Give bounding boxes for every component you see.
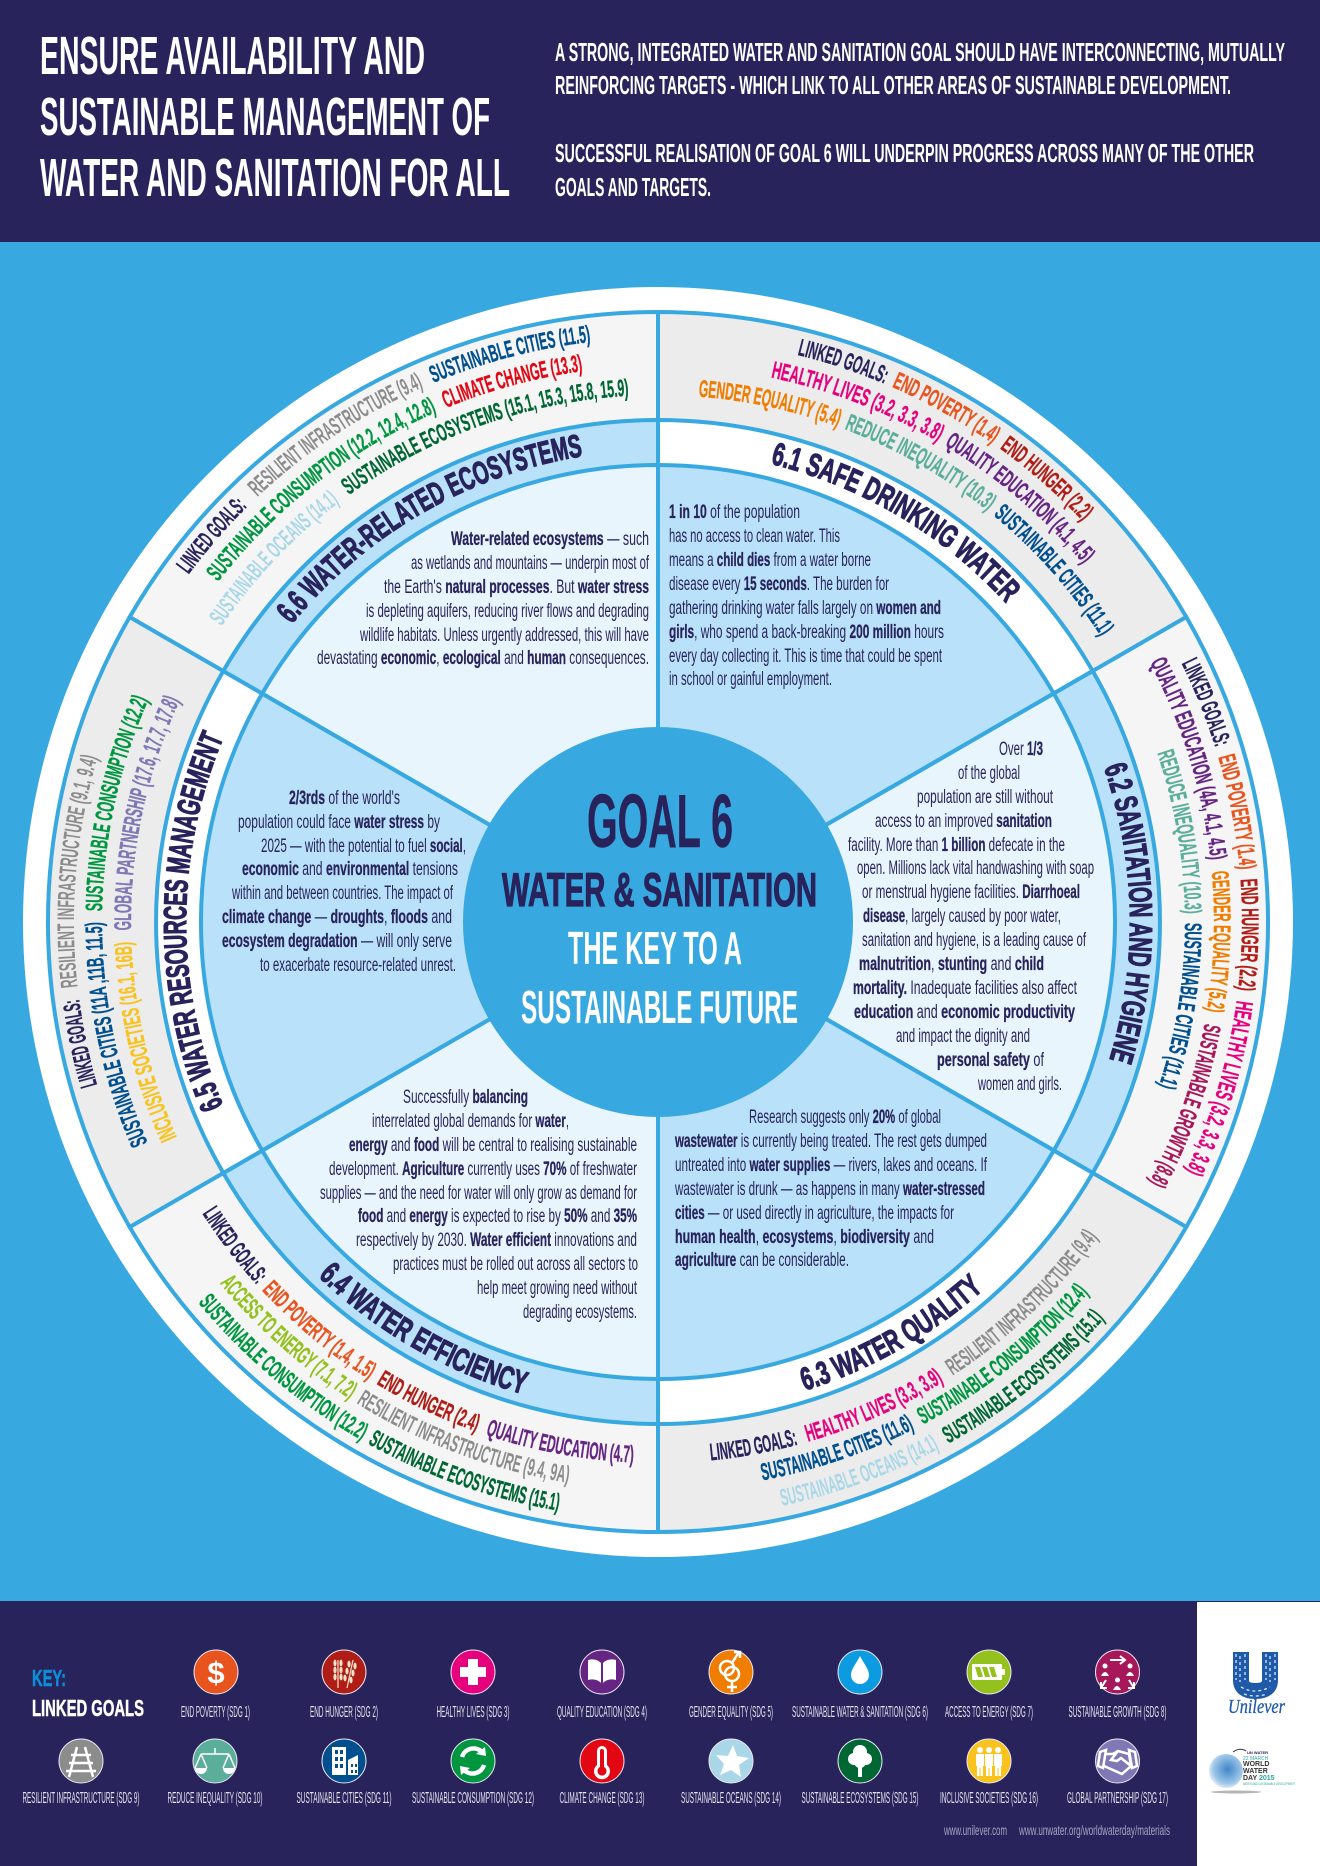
icon: end hunger	[310, 1650, 378, 1721]
panel: 6.4 water efficiency	[127, 1021, 656, 1534]
text: GLOBAL PARTNERSHIP (SDG 17)	[1067, 1790, 1168, 1807]
body text 6.2: disease, largely caused by poor water,	[863, 906, 1061, 927]
body text 6.2: Over 1/3	[999, 739, 1043, 760]
body text 6.5: population could face water stress by	[238, 812, 440, 833]
body text 6.5	[222, 788, 466, 976]
body text 6.2: sanitation and hygiene, is a leading cause of	[862, 930, 1086, 951]
body text 6.4: help meet growing need without	[477, 1278, 637, 1299]
title: WATER AND SANITATION FOR ALL	[40, 148, 510, 208]
body text 6.2: and impact the dignity and	[896, 1026, 1030, 1047]
linked goals 6.4: LINKED GOALS:	[202, 1205, 266, 1284]
body text 6.5: to exacerbate resource-related unrest.	[260, 955, 456, 976]
icon: sustainable cities	[296, 1739, 392, 1807]
linked goals 6.2: LINKED GOALS:	[1182, 656, 1230, 747]
icon: sustainable water and sanitation	[792, 1650, 928, 1721]
icon: sustainable growth	[1068, 1650, 1166, 1721]
body text 6.6: wildlife habitats. Unless urgently addressed, this will have	[359, 625, 649, 646]
icon: world water day logo	[1209, 1749, 1296, 1794]
centre circle	[463, 727, 853, 1117]
body text 6.5: climate change — droughts, floods and	[222, 907, 452, 928]
website links: www.unwater.org/worldwaterday/materials	[1018, 1822, 1170, 1838]
text: END HUNGER (SDG 2)	[310, 1704, 378, 1721]
icon: gender equality	[689, 1650, 773, 1721]
heading 6.3: 6.3 WATER QUALITY	[800, 1272, 980, 1390]
linked goals 6.5: SUSTAINABLE CONSUMPTION (12.2)	[81, 691, 154, 912]
linked goals 6.6: SUSTAINABLE CITIES (11.5)	[425, 299, 598, 409]
linked goals 6.3: SUSTAINABLE CITIES (11.6)	[760, 1414, 915, 1480]
text: GENDER EQUALITY (SDG 5)	[689, 1704, 773, 1721]
icon: access to energy	[945, 1650, 1033, 1721]
body text 6.4: interrelated global demands for water,	[372, 1111, 569, 1132]
linked goals 6.3: RESILIENT INFRASTRUCTURE (9.4)	[944, 1228, 1100, 1376]
linked goals 6.1: END POVERTY (1.4)	[892, 372, 1001, 446]
body text 6.2: women and girls.	[977, 1074, 1062, 1095]
body text 6.3: untreated into water supplies — rivers, lakes and oceans. If	[675, 1155, 987, 1176]
linked goals 6.3: HEALTHY LIVES (3.3, 3.9)	[804, 1368, 944, 1442]
icon: unilever logo	[1228, 1652, 1285, 1718]
linked goals 6.3: SUSTAINABLE CONSUMPTION (12.4)	[916, 1282, 1091, 1424]
body text 6.4: energy and food will be central to realising sustainable	[349, 1135, 637, 1156]
icon: world water day logo: UN WATER	[1247, 1750, 1268, 1755]
icon: sustainable ecosystems	[802, 1739, 918, 1807]
panel: 6.5 water resources management	[46, 614, 490, 1230]
body text 6.2: education and economic productivity	[854, 1002, 1075, 1023]
linked goals 6.4: RESILIENT INFRASTRUCTURE (9.4, 9A)	[356, 1390, 570, 1488]
body text 6.6: devastating economic, ecological and human consequences.	[317, 648, 649, 669]
body text 6.5: 2/3rds of the world's	[289, 788, 400, 809]
heading 6.5: 6.5 WATER RESOURCES MANAGEMENT	[163, 728, 222, 1112]
key to a sustainable future: SUSTAINABLE FUTURE	[521, 981, 798, 1033]
water and sanitation heading: WATER & SANITATION	[502, 863, 817, 916]
linked goals 6.4: SUSTAINABLE CONSUMPTION (12.2)	[200, 1294, 368, 1444]
header band	[0, 0, 1320, 242]
text: CLIMATE CHANGE (SDG 13)	[560, 1790, 644, 1807]
linked goals 6.2: END POVERTY (1.4)	[1218, 753, 1257, 869]
text: SUSTAINABLE CONSUMPTION (SDG 12)	[412, 1790, 534, 1807]
icon: world water day logo: WATER	[1243, 1768, 1268, 1775]
body text 6.2: facility. More than 1 billion defecate in the	[848, 835, 1065, 856]
body text 6.4: supplies — and the need for water will only grow as demand for	[320, 1183, 637, 1204]
key to a sustainable future	[521, 922, 798, 1033]
icon: quality education	[557, 1650, 647, 1721]
icon: world water day logo: DAY 2015	[1243, 1775, 1275, 1782]
body text 6.2: of the global	[958, 763, 1020, 784]
linked goals 6.3: SUSTAINABLE OCEANS (14.1)	[780, 1434, 940, 1506]
linked goals 6.2: QUALITY EDUCATION (4A, 4.1, 4.5)	[1148, 657, 1228, 860]
body text 6.1: means a child dies from a water borne	[669, 550, 871, 571]
linked goals 6.1	[699, 338, 1114, 638]
linked goals 6.1: GENDER EQUALITY (5.4)	[699, 380, 842, 431]
icon: sustainable consumption	[412, 1739, 534, 1807]
body text 6.3: cities — or used directly in agriculture, the impacts for	[675, 1203, 954, 1224]
body text 6.6: Water-related ecosystems — such	[451, 529, 649, 550]
body text 6.3: Research suggests only 20% of global	[749, 1107, 941, 1128]
linked goals 6.6: CLIMATE CHANGE (13.3)	[438, 333, 590, 430]
linked goals 6.5: INCLUSIVE SOCIETIES (16.1, 16B)	[74, 932, 217, 1146]
heading 6.6: 6.6 WATER-RELATED ECOSYSTEMS	[269, 347, 599, 703]
icon: resilient infrastructure	[22, 1739, 140, 1807]
body text 6.5: within and between countries. The impact of	[231, 883, 453, 904]
text: HEALTHY LIVES (SDG 3)	[436, 1704, 510, 1721]
body text 6.1: gathering drinking water falls largely on women and	[669, 598, 941, 619]
linked goals 6.2	[1146, 656, 1259, 1188]
key heading	[32, 1665, 144, 1721]
text: SUSTAINABLE ECOSYSTEMS (SDG 15)	[802, 1790, 918, 1807]
title	[40, 26, 510, 208]
text: END POVERTY (SDG 1)	[181, 1704, 250, 1721]
body text 6.6: the Earth's natural processes. But water stress	[384, 577, 649, 598]
icon: end poverty: $	[207, 1655, 225, 1690]
blue background	[0, 242, 1320, 1601]
body text 6.6	[317, 529, 649, 669]
text: SUSTAINABLE CITIES (SDG 11)	[296, 1790, 392, 1807]
goal 6 heading: GOAL 6	[587, 779, 733, 863]
body text 6.3: wastewater is currently being treated. The rest gets dumped	[674, 1131, 987, 1152]
body text 6.4	[320, 1087, 638, 1323]
linked goals 6.5: LINKED GOALS:	[63, 1000, 98, 1089]
linked goals 6.2: REDUCE INEQUALITY (10.3)	[1157, 748, 1202, 914]
body text 6.4: respectively by 2030. Water efficient innovations and	[356, 1230, 637, 1251]
linked goals 6.4	[200, 1158, 634, 1516]
text: SUSTAINABLE OCEANS (SDG 14)	[681, 1790, 781, 1807]
linked goals 6.5: GLOBAL PARTNERSHIP (17.6, 17.7, 17.8)	[106, 691, 189, 931]
linked goals 6.4: ACCESS TO ENERGY (7.1, 7.2)	[220, 1275, 358, 1402]
text: SUSTAINABLE GROWTH (SDG 8)	[1068, 1704, 1166, 1721]
heading 6.4: 6.4 WATER EFFICIENCY	[320, 1262, 530, 1394]
icon: world water day logo: 22 MARCH	[1243, 1756, 1269, 1762]
body text 6.3: agriculture can be considerable.	[675, 1250, 849, 1271]
linked goals 6.4: SUSTAINABLE ECOSYSTEMS (15.1)	[369, 1430, 560, 1516]
body text 6.2: access to an improved sanitation	[875, 811, 1052, 832]
body text 6.4: degrading ecosystems.	[523, 1302, 637, 1323]
body text 6.4: practices must be rolled out across all sectors to	[393, 1254, 638, 1275]
website links: www.unilever.com	[943, 1822, 1007, 1838]
body text 6.4: Successfully balancing	[403, 1087, 528, 1108]
body text 6.2: or menstrual hygiene facilities. Diarrhoeal	[862, 882, 1080, 903]
logo panel	[1197, 1602, 1320, 1866]
body text 6.1: girls, who spend a back-breaking 200 million hours	[669, 622, 944, 643]
linked goals 6.4: QUALITY EDUCATION (4.7)	[487, 1420, 634, 1468]
linked goals 6.3	[710, 1228, 1107, 1506]
body text 6.6: is depleting aquifers, reducing river flows and degrading	[366, 601, 649, 622]
text: INCLUSIVE SOCIETIES (SDG 16)	[940, 1790, 1038, 1807]
body text 6.5: ecosystem degradation — will only serve	[222, 931, 452, 952]
text: ACCESS TO ENERGY (SDG 7)	[945, 1704, 1033, 1721]
linked goals 6.6: SUSTAINABLE CONSUMPTION (12.2, 12.4, 12.8)	[201, 349, 447, 627]
linked goals 6.6: RESILIENT INFRASTRUCTURE (9.4)	[243, 342, 432, 526]
icon: healthy lives	[436, 1650, 510, 1721]
linked goals 6.1: QUALITY EDUCATION (4.1, 4.5)	[946, 433, 1096, 566]
icon: end poverty	[181, 1650, 250, 1721]
key heading: KEY:	[32, 1665, 66, 1691]
intro text: GOALS AND TARGETS.	[555, 172, 711, 202]
icon: unilever logo: Unilever	[1228, 1696, 1285, 1718]
body text 6.1	[669, 502, 944, 690]
body text 6.2: population are still without	[917, 787, 1053, 808]
panel: 6.2 sanitation and hygiene	[826, 614, 1270, 1230]
body text 6.4: food and energy is expected to rise by 50% and 35%	[358, 1206, 637, 1227]
panel: 6.1 safe drinking water	[660, 310, 1189, 823]
icon: reduce inequality	[168, 1739, 262, 1807]
icon: inclusive societies	[940, 1739, 1038, 1807]
body text 6.1: 1 in 10 of the population	[669, 502, 800, 523]
linked goals 6.2: SUSTAINABLE CITIES (11.1)	[1154, 923, 1202, 1090]
body text 6.3: wastewater is drunk — as happens in many water-stressed	[674, 1179, 985, 1200]
linked goals 6.1: HEALTHY LIVES (3.2, 3.3, 3.8)	[772, 361, 945, 445]
linked goals 6.3: SUSTAINABLE ECOSYSTEMS (15.1)	[942, 1308, 1107, 1442]
body text 6.2: open. Millions lack vital handwashing with soap	[857, 858, 1094, 879]
footer band	[0, 1601, 1320, 1866]
linked goals 6.1: LINKED GOALS:	[798, 338, 888, 384]
heading 6.2: 6.2 SANITATION AND HYGIENE	[1104, 762, 1153, 1066]
linked goals 6.6: LINKED GOALS:	[172, 488, 254, 582]
body text 6.6: as wetlands and mountains — underpin most of	[411, 553, 649, 574]
linked goals 6.4: END HUNGER (2.4)	[376, 1370, 480, 1436]
linked goals 6.2: HEALTHY LIVES (3.2, 3.3, 3.8)	[1182, 1001, 1254, 1176]
linked goals 6.6	[176, 324, 628, 625]
linked goals 6.3: LINKED GOALS:	[710, 1430, 798, 1460]
linked goals 6.1: REDUCE INEQUALITY (10.3)	[844, 414, 997, 514]
body text 6.3: human health, ecosystems, biodiversity and	[675, 1227, 934, 1248]
linked goals 6.6: SUSTAINABLE ECOSYSTEMS (15.1, 15.3, 15.8, 15.9)	[337, 304, 641, 567]
icon: climate change	[560, 1739, 644, 1807]
linked goals 6.5	[57, 694, 184, 1148]
body text 6.5: economic and environmental tensions	[242, 859, 458, 880]
body text 6.2: personal safety of	[937, 1050, 1044, 1071]
linked goals 6.1: SUSTAINABLE CITIES (11.1)	[994, 504, 1114, 638]
linked goals 6.5: RESILIENT INFRASTRUCTURE (9.1, 9.4)	[57, 754, 102, 988]
panel: 6.3 water quality	[660, 1018, 1189, 1534]
heading 6.1: 6.1 SAFE DRINKING WATER	[772, 442, 1020, 604]
linked goals 6.4: END POVERTY (1.4, 1.5)	[262, 1279, 376, 1382]
linked goals 6.2: END HUNGER (2.2)	[1233, 878, 1259, 990]
title: ENSURE AVAILABILITY AND	[40, 26, 425, 86]
body text 6.2	[848, 739, 1094, 1095]
body text 6.1: in school or gainful employment.	[669, 669, 832, 690]
panel: 6.6 water-related ecosystems	[127, 310, 656, 826]
website links	[943, 1822, 1170, 1838]
linked goals 6.6: SUSTAINABLE OCEANS (14.1)	[204, 469, 348, 645]
icon: global partnership	[1067, 1739, 1168, 1807]
linked goals 6.2: GENDER EQUALITY (5.2)	[1202, 871, 1231, 1012]
linked goals 6.5: SUSTAINABLE CITIES (11A ,11B, 11.5)	[84, 922, 147, 1148]
linked goals 6.2: SUSTAINABLE GROWTH (8.8)	[1146, 1024, 1221, 1188]
icon: world water day logo: WATER AND SUSTAINABLE DEVELOPMENT	[1243, 1782, 1296, 1786]
text: REDUCE INEQUALITY (SDG 10)	[168, 1790, 262, 1807]
body text 6.5: 2025 — with the potential to fuel social,	[261, 836, 466, 857]
intro text	[555, 37, 1285, 202]
key heading: LINKED GOALS	[32, 1695, 144, 1721]
body text 6.1: every day collecting it. This is time that could be spent	[669, 646, 942, 667]
body text 6.2: mortality. Inadequate facilities also affect	[853, 978, 1077, 999]
icon: world water day logo: WORLD	[1243, 1761, 1269, 1768]
title: SUSTAINABLE MANAGEMENT OF	[40, 87, 490, 147]
text: RESILIENT INFRASTRUCTURE (SDG 9)	[22, 1790, 140, 1807]
body text 6.1: disease every 15 seconds. The burden for	[669, 574, 889, 595]
wheel	[23, 287, 1293, 1557]
icon: sustainable oceans	[681, 1739, 781, 1807]
key to a sustainable future: THE KEY TO A	[568, 922, 742, 974]
text: QUALITY EDUCATION (SDG 4)	[557, 1704, 647, 1721]
body text 6.3	[674, 1107, 987, 1271]
linked goals 6.1: END HUNGER (2.2)	[1000, 435, 1094, 524]
body text 6.1: has no access to clean water. This	[669, 526, 840, 547]
body text 6.2: malnutrition, stunting and child	[859, 954, 1044, 975]
text: SUSTAINABLE WATER & SANITATION (SDG 6)	[792, 1704, 928, 1721]
body text 6.4: development. Agriculture currently uses 70% of freshwater	[329, 1159, 637, 1180]
